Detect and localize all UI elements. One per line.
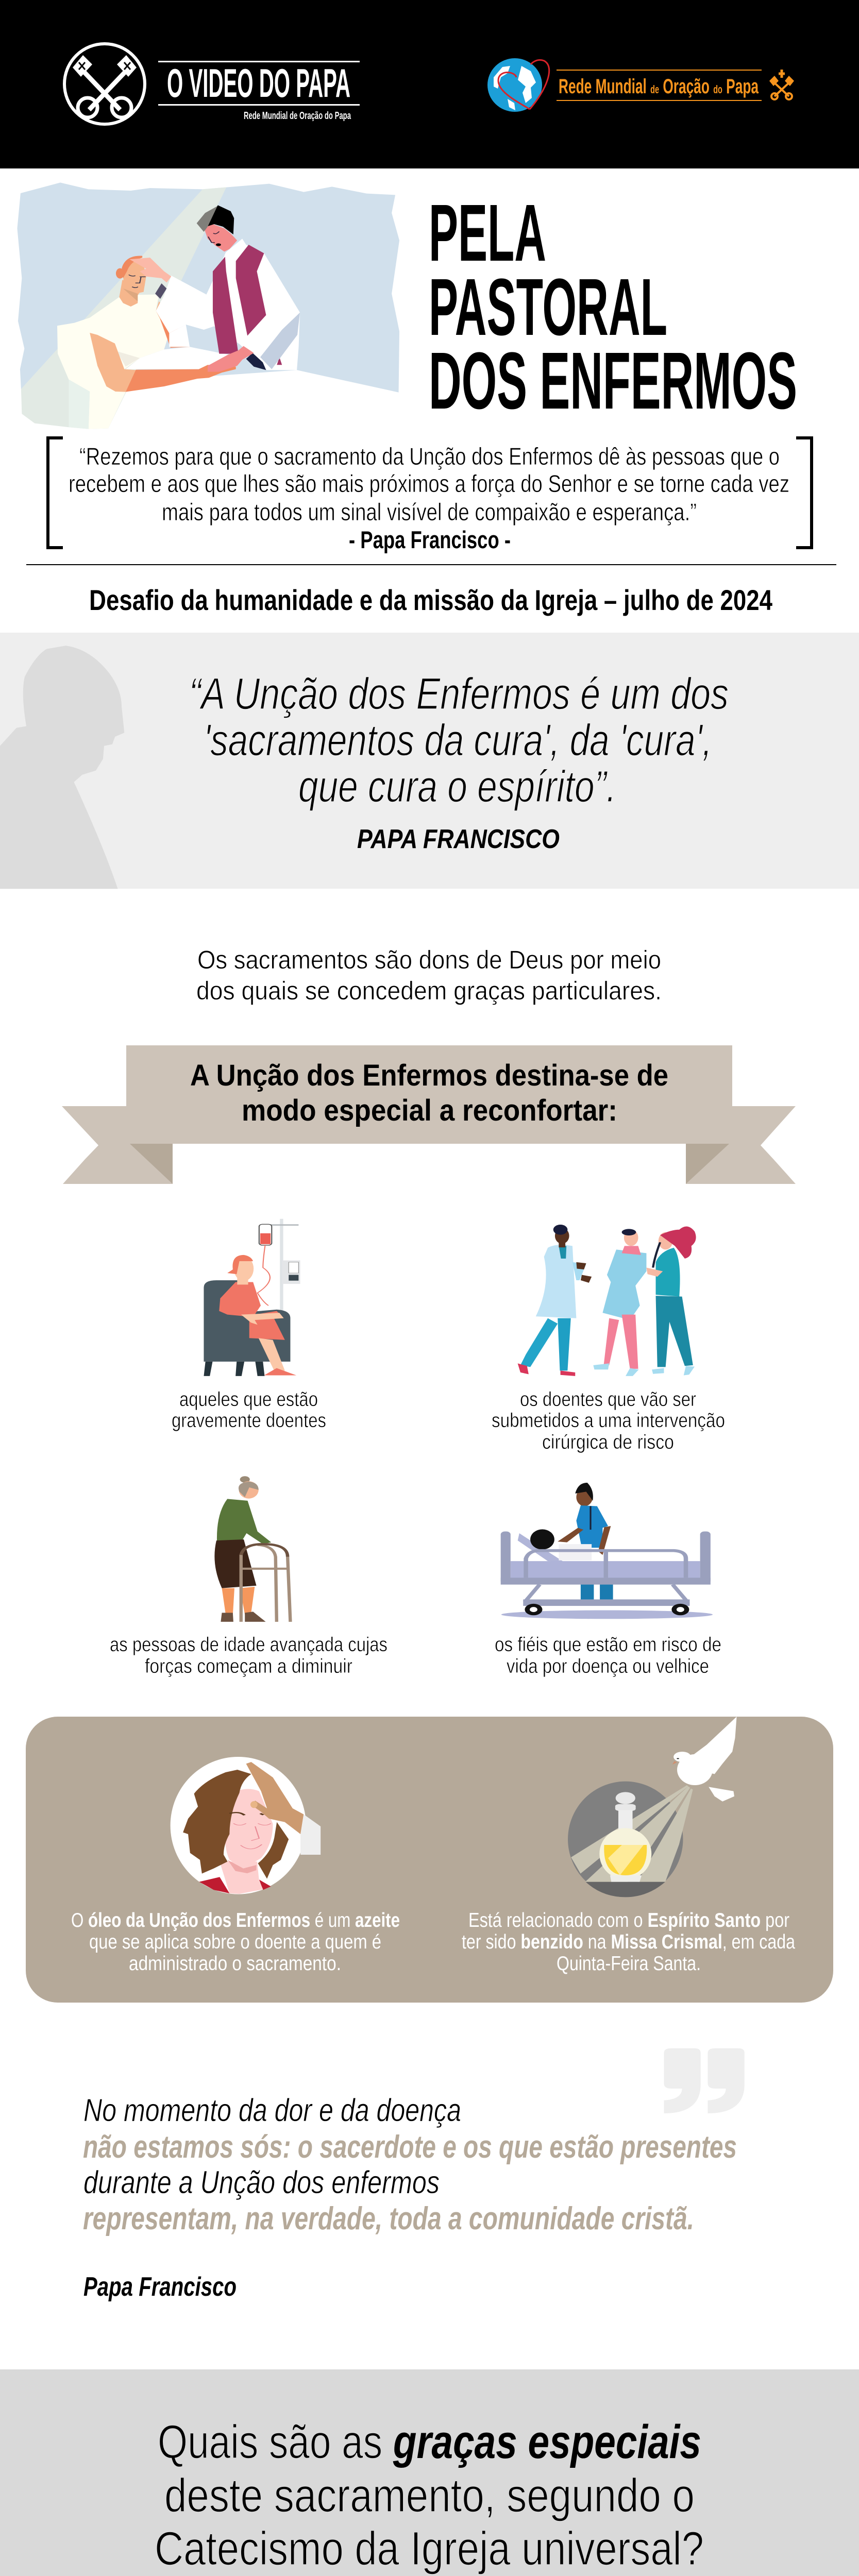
caption: gravemente doentes <box>172 1410 326 1432</box>
prayer intention quote <box>48 438 812 553</box>
caption: os doentes que vão ser <box>520 1388 696 1411</box>
prayer intention quote: mais para todos um sinal visível de compaixão e esperança.” <box>162 498 697 526</box>
item: elderly <box>110 1476 388 1677</box>
text: Holy Spirit relation: Quinta-Feira Santa. <box>557 1953 701 1975</box>
text: oil description <box>71 1909 400 1975</box>
intro text: dos quais se concedem graças particulares. <box>196 976 662 1005</box>
caption: submetidos a uma intervenção <box>492 1410 725 1432</box>
quote attribution: PAPA FRANCISCO <box>357 824 560 854</box>
quote text: durante a Unção dos enfermos <box>83 2165 440 2200</box>
icon: nurse beside hospital bed <box>501 1483 713 1619</box>
caption: os fiéis que estão em risco de <box>495 1634 721 1656</box>
prayer intention quote: - Papa Francisco - <box>349 526 511 553</box>
item: surgery patients <box>492 1225 725 1453</box>
ribbon banner: A Unção dos Enfermos destina-se de <box>190 1059 668 1092</box>
item: gravely ill <box>172 1219 326 1432</box>
title <box>429 188 797 426</box>
icon: anointing forehead <box>171 1757 321 1894</box>
title: PELA <box>429 188 546 278</box>
ribbon banner <box>62 1045 796 1184</box>
caption: vida por doença ou velhice <box>507 1655 709 1677</box>
illustration: priest anointing patient <box>17 182 399 429</box>
logo text: O Video do Papa: O VIDEO DO PAPA <box>167 60 350 106</box>
caption <box>110 1634 388 1677</box>
text: oil description: que se aplica sobre o doente a quem é <box>89 1931 381 1953</box>
text: oil description: O óleo da Unção dos Enfermos é um azeite <box>71 1909 400 1931</box>
icon: patient in armchair <box>204 1219 300 1376</box>
logo: globe with heart <box>487 58 549 112</box>
icon: doctors and patient <box>518 1225 696 1376</box>
header banner <box>0 0 859 168</box>
intro text <box>196 945 662 1005</box>
quote text: No momento da dor e da doença <box>83 2093 461 2128</box>
ribbon banner: modo especial a reconfortar: <box>242 1094 617 1127</box>
heading: Catecismo da Igreja universal? <box>155 2522 704 2575</box>
quote text <box>83 2093 737 2236</box>
logo text: O Video do Papa: Rede Mundial de Oração do Papa <box>244 110 351 122</box>
heading: Quais são as graças especiais <box>158 2416 701 2468</box>
icon: oil bottle with dove <box>568 1717 737 1897</box>
caption: cirúrgica de risco <box>542 1431 674 1453</box>
icon: small keys <box>769 70 794 99</box>
caption: aqueles que estão <box>179 1388 318 1411</box>
logo: crossed keys <box>64 44 145 124</box>
text: Holy Spirit relation <box>462 1909 795 1975</box>
quote text: representam, na verdade, toda a comunidade cristã. <box>83 2201 694 2236</box>
silhouette: Pope Francis profile <box>0 634 124 889</box>
icon: elderly woman with walker <box>214 1476 290 1622</box>
text: Holy Spirit relation: Está relacionado com o Espírito Santo por <box>468 1909 789 1931</box>
caption: forças começam a diminuir <box>145 1655 352 1677</box>
caption <box>492 1388 725 1453</box>
title: PASTORAL <box>429 262 667 352</box>
text: Holy Spirit relation: ter sido benzido na Missa Crismal, em cada <box>462 1931 795 1953</box>
quote text <box>189 669 729 811</box>
quote text: que cura o espírito”. <box>298 762 616 811</box>
logo text: Rede Mundial de Oração do Papa: Rede Mundial de Oração do Papa <box>559 75 759 98</box>
heading: deste sacramento, segundo o <box>164 2469 695 2522</box>
caption: as pessoas de idade avançada cujas <box>110 1634 388 1656</box>
caption <box>495 1634 721 1677</box>
heading <box>155 2416 704 2575</box>
quote text: 'sacramentos da cura', da 'cura', <box>204 716 712 765</box>
panel: oil of anointing <box>26 1717 833 2003</box>
intro text: Os sacramentos são dons de Deus por meio <box>197 945 661 974</box>
quote block <box>83 2048 745 2302</box>
quote text: “A Unção dos Enfermos é um dos <box>189 669 729 719</box>
item: at risk of life <box>495 1483 721 1677</box>
attribution: Papa Francisco <box>83 2272 237 2302</box>
panel: special graces <box>0 2369 859 2576</box>
icon: quotation mark <box>664 2048 745 2113</box>
logo text: O Video do Papa <box>158 60 360 122</box>
text: oil description: administrado o sacramento. <box>129 1953 341 1975</box>
caption <box>172 1388 326 1432</box>
panel: pope quote <box>0 633 859 889</box>
